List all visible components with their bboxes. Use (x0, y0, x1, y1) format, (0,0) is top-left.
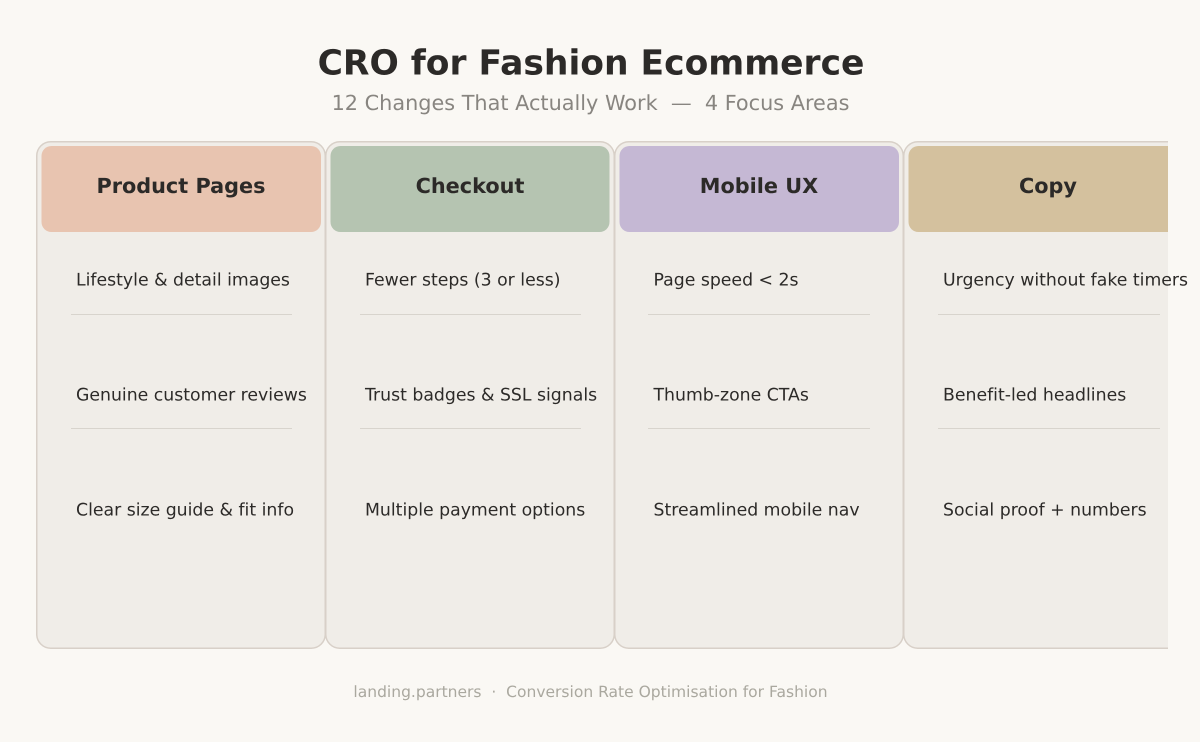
item: trust badges: Trust badges & SSL signals (364, 385, 597, 405)
panel: Product Pages (37, 142, 325, 648)
item: social proof: Social proof + numbers (943, 500, 1147, 520)
item: payment options: Multiple payment options (365, 500, 585, 520)
header: Checkout: Checkout (416, 174, 524, 198)
panel: Copy (904, 142, 1192, 648)
header: Mobile UX (620, 146, 899, 232)
item: page speed: Page speed < 2s (654, 270, 799, 290)
footer: landing.partners · Conversion Rate Optimisation for Fashion (353, 683, 828, 701)
panel: Mobile UX (615, 142, 903, 648)
item: benefit-led headlines: Benefit-led headlines (943, 385, 1126, 405)
subtitle: 12 Changes That Actually Work — 4 Focus Areas (332, 91, 849, 115)
item: urgency: Urgency without fake timers (943, 270, 1188, 290)
header: Product Pages: Product Pages (96, 174, 266, 198)
header: Checkout (330, 146, 610, 232)
item: mobile nav: Streamlined mobile nav (654, 500, 860, 520)
item: customer reviews: Genuine customer reviews (76, 385, 307, 405)
item: thumb-zone CTAs: Thumb-zone CTAs (652, 385, 809, 405)
header: Copy: Copy (1019, 174, 1077, 198)
header: Product Pages (42, 146, 321, 232)
item: fewer steps: Fewer steps (3 or less) (365, 270, 560, 290)
header: Mobile UX: Mobile UX (700, 174, 818, 198)
panel: Checkout (326, 142, 614, 648)
item: lifestyle images: Lifestyle & detail images (76, 270, 290, 290)
title: CRO for Fashion Ecommerce (318, 43, 864, 83)
item: size guide: Clear size guide & fit info (76, 500, 294, 520)
